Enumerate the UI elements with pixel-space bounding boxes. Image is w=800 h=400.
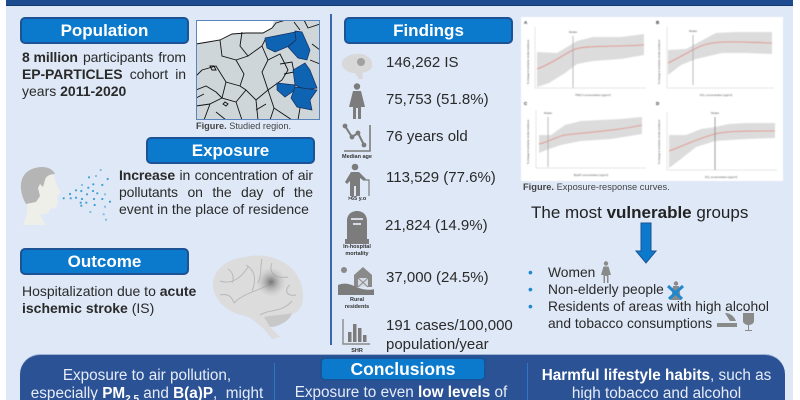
panel D: SO₂ concentration [µg/m³]: [705, 175, 737, 179]
value: [386, 317, 513, 353]
conclusion text 3: [528, 367, 785, 400]
panel B: Median: [689, 30, 698, 33]
vulnerable groups list: [528, 261, 769, 331]
conclusion text 3: Harmful lifestyle habits, such as: [542, 367, 771, 384]
title band: [6, 0, 793, 6]
icon label: >65 y.o: [348, 196, 366, 202]
value: 21,824 (14.9%): [385, 217, 488, 234]
finding: women: [349, 83, 489, 119]
heading: population: Population: [61, 21, 148, 40]
vulnerable groups list: Non-elderly people: [548, 282, 664, 297]
vulnerable groups list: •: [528, 265, 533, 280]
heading: conclusions: Conclusions: [350, 359, 456, 379]
population text: from: [158, 49, 186, 65]
exposure text: Increase: [119, 167, 175, 183]
panel B: B: [656, 20, 660, 25]
heading: vulnerable groups: The most vulnerable groups: [531, 203, 748, 222]
exposure text: of: [282, 167, 293, 183]
icon label: mortality: [345, 251, 369, 257]
conclusion text 1: [31, 367, 264, 400]
icon: brain with ischemic area: [213, 256, 303, 339]
heading: conclusions: [320, 357, 486, 381]
exposure text: in: [179, 167, 190, 183]
population text: years 2011-2020: [22, 83, 126, 99]
panel B: NO₂ concentration [µg/m³]: [700, 93, 732, 97]
panel: conclusions: [20, 354, 785, 400]
exposure text: [119, 167, 313, 217]
arrow: down to vulnerable list: [635, 222, 657, 264]
divider right: [527, 363, 528, 400]
population text: EP-PARTICLES: [22, 66, 122, 82]
panel: population: [20, 17, 189, 99]
heading: population: [20, 17, 189, 44]
map caption: Figure. Studied region.: [196, 121, 291, 131]
icon: person exhaling pollutants: [20, 167, 112, 225]
icon: elderly person: [345, 164, 370, 196]
icon: barn: [338, 267, 374, 295]
icon: woman: [601, 261, 611, 283]
bullet: residents: [528, 299, 769, 331]
heading: exposure: [146, 137, 315, 164]
finding: SHR: [342, 317, 513, 354]
panel A: [524, 20, 646, 97]
heading: exposure: Exposure: [192, 141, 269, 160]
panel B: % change in ischemic stroke incidence: [657, 39, 661, 84]
exposure text: the: [294, 184, 313, 200]
value: population/year: [386, 336, 489, 353]
exposure text: pollutants: [119, 184, 178, 200]
population text: in: [175, 66, 186, 82]
vulnerable groups list: •: [528, 282, 533, 297]
panel D: Median: [711, 112, 720, 115]
icon: brain: [342, 54, 372, 79]
conclusion text 1: Exposure to air pollution,: [63, 367, 231, 384]
bullet: women: [528, 261, 611, 283]
finding: over 65: [345, 164, 496, 202]
map: studied region: [196, 20, 320, 120]
vulnerable groups list: and tobacco consumptions: [548, 316, 712, 331]
icon: bar chart: [342, 319, 370, 345]
exposure text: event in the place of residence: [119, 201, 309, 217]
outcome text: Hospitalization due to acute: [22, 283, 196, 299]
panel C: % change in ischemic stroke incidence: [526, 119, 530, 164]
exposure text: day: [241, 184, 263, 200]
value: 191 cases/100,000: [386, 317, 513, 334]
outcome text: ischemic stroke (IS): [22, 300, 154, 316]
panel: exposure: [20, 137, 315, 225]
icon: tombstone: [345, 211, 369, 244]
vulnerable groups list: •: [528, 299, 533, 314]
panel A: Median: [569, 31, 578, 34]
chart caption: Figure. Exposure-response curves.: [523, 182, 670, 192]
heading: outcome: Outcome: [68, 252, 141, 271]
heading: findings: Findings: [393, 21, 464, 40]
divider between columns: [330, 14, 332, 345]
icon: cigarette and wine: [717, 313, 754, 331]
icon label: residents: [345, 304, 369, 310]
value: 75,753 (51.8%): [386, 91, 489, 108]
finding: IS cases: [342, 54, 459, 79]
population text: 8 million: [22, 49, 78, 65]
icon label: Median age: [342, 154, 372, 160]
value: 37,000 (24.5%): [386, 269, 489, 286]
icon label: [343, 244, 371, 257]
panel: outcome: [20, 248, 303, 339]
panel: findings: [338, 17, 513, 354]
exposure text: on: [187, 184, 203, 200]
icon: crossed elderly person: [667, 281, 684, 300]
icon label: SHR: [351, 348, 363, 354]
heading: findings: [344, 17, 513, 44]
value: 146,262 IS: [386, 54, 459, 71]
chart: exposure-response curves: [520, 16, 784, 182]
finding: in-hospital mortality: [343, 211, 488, 257]
panel A: A: [524, 20, 528, 25]
population text: cohort: [130, 66, 168, 82]
finding: median age: [342, 124, 468, 160]
panel D: % change in ischemic stroke incidence: [657, 119, 661, 164]
icon label: [345, 297, 369, 310]
exposure text: air: [298, 167, 313, 183]
exposure text: concentration: [195, 167, 277, 183]
population text: participants: [83, 49, 153, 65]
panel B: [656, 20, 774, 97]
exposure text: the: [212, 184, 232, 200]
value: 76 years old: [386, 128, 468, 145]
panel C: [524, 101, 646, 177]
icon: woman: [349, 83, 365, 119]
population text: [22, 49, 186, 99]
divider left: [274, 363, 275, 400]
outcome text: [22, 283, 196, 316]
panel A: % change in ischemic stroke incidence: [526, 39, 530, 84]
vulnerable groups list: Residents of areas with high alcohol: [548, 299, 769, 314]
icon label: In-hospital: [343, 244, 371, 250]
heading: outcome: [20, 248, 189, 275]
vulnerable groups list: Women: [548, 265, 595, 280]
panel A: PM2.5 concentration [µg/m³]: [575, 93, 611, 97]
value: 113,529 (77.6%): [386, 169, 496, 186]
icon label: Rural: [350, 297, 364, 303]
icon: line chart: [342, 124, 371, 152]
panel C: Median: [544, 112, 553, 115]
finding: rural residents: [338, 267, 489, 310]
panel D: D: [656, 101, 660, 106]
panel C: B(a)P concentration [ng/m³]: [574, 173, 608, 177]
panel D: [656, 101, 777, 179]
bullet: non-elderly: [528, 281, 684, 300]
panel C: C: [524, 101, 528, 106]
exposure text: of: [273, 184, 284, 200]
